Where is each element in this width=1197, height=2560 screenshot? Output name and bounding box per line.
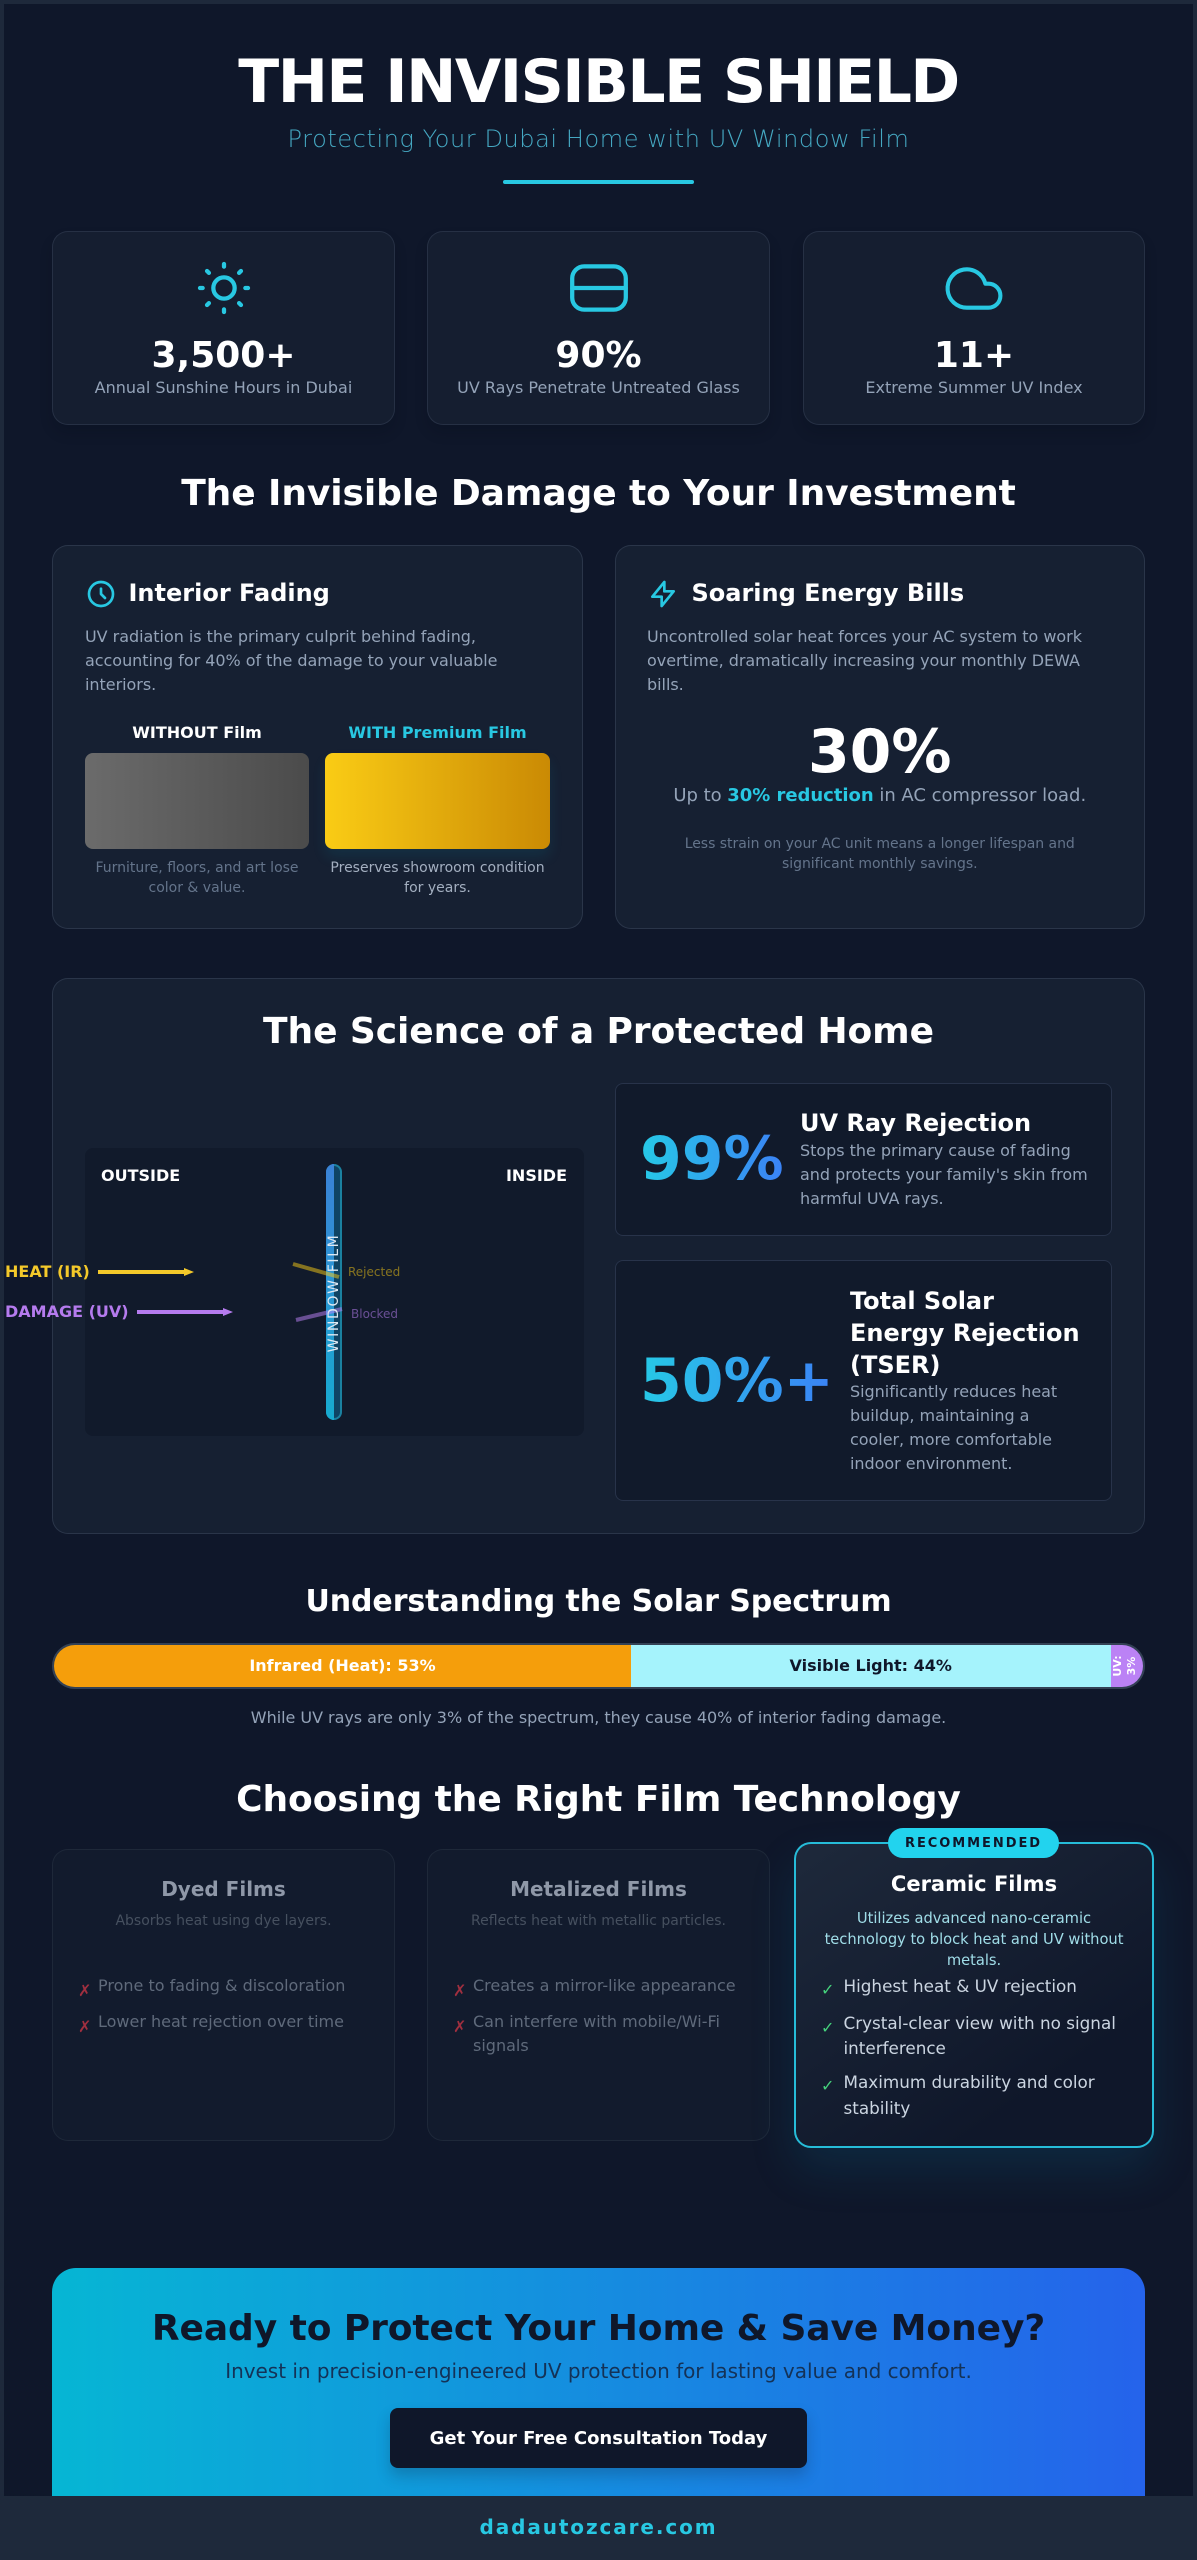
- icon: lightning bolt: [650, 580, 676, 608]
- list item: Creates a mirror-like appearance: [473, 1976, 736, 1995]
- panel: stat UV index: [803, 231, 1145, 425]
- arrow: uv: [137, 1308, 233, 1316]
- list item: ✗: [453, 2017, 466, 2036]
- metric description: [800, 1141, 1088, 1208]
- body text: [647, 627, 1082, 694]
- panel: stat sunshine hours: [52, 231, 395, 425]
- ray: uv blocked: [296, 1309, 342, 1320]
- card description: metals.: [947, 1952, 1001, 1969]
- list item: ✓: [821, 2018, 834, 2037]
- card description: [825, 1910, 1124, 1969]
- label: without film: WITHOUT Film: [132, 723, 262, 742]
- list item: Can interfere with mobile/Wi-Fi: [473, 2012, 720, 2031]
- list item: [821, 2072, 1095, 2118]
- label: heat: HEAT (IR): [5, 1262, 90, 1280]
- icon: sun: [198, 262, 250, 314]
- badge: recommended: [888, 1828, 1059, 1858]
- panel: metalized films: [427, 1849, 770, 2141]
- metric title: Total Solar: [850, 1287, 994, 1315]
- list item: Prone to fading & discoloration: [98, 1976, 345, 1995]
- card description: Absorbs heat using dye layers.: [115, 1913, 332, 1929]
- metric description: indoor environment.: [850, 1454, 1012, 1473]
- metric description: harmful UVA rays.: [800, 1189, 944, 1208]
- footnote: Less strain on your AC unit means a longer lifespan and: [685, 836, 1075, 852]
- list item: stability: [844, 2098, 910, 2118]
- panel heading: Interior Fading: [128, 579, 330, 607]
- metric title: UV Ray Rejection: [800, 1109, 1031, 1137]
- caption: preserved: [330, 860, 545, 896]
- cta button: Get Your Free Consultation Today: [430, 2428, 767, 2449]
- list item: ✓: [821, 2076, 834, 2095]
- list item: Crystal-clear view with no signal: [844, 2013, 1116, 2033]
- card title: Dyed Films: [161, 1877, 286, 1901]
- panel heading: Soaring Energy Bills: [692, 579, 964, 607]
- metric title: Energy Rejection: [850, 1319, 1080, 1347]
- panel: energy bills: [614, 545, 1145, 929]
- metric description: Significantly reduces heat: [850, 1382, 1057, 1401]
- label: rejected: Rejected: [348, 1264, 400, 1278]
- caption: faded: color & value.: [148, 880, 245, 896]
- list item: ✗: [453, 1981, 466, 2000]
- list item: [821, 2013, 1116, 2058]
- footnote: significant monthly savings.: [782, 856, 978, 872]
- body text: accounting for 40% of the damage to your valuable: [85, 651, 497, 670]
- rays: [98, 1262, 342, 1322]
- swatch: faded: [85, 753, 309, 849]
- heading: The Science of a Protected Home: [263, 1010, 934, 1052]
- title: THE INVISIBLE SHIELD: [238, 47, 959, 117]
- caption: faded: [95, 860, 299, 896]
- body text: interiors.: [85, 675, 156, 694]
- segment: infrared: Infrared (Heat): 53%: [249, 1656, 436, 1675]
- list item: ✗: [78, 1981, 91, 2000]
- list item: ✗: [78, 2017, 91, 2036]
- title underline: [503, 180, 694, 184]
- card description: technology to block heat and UV without: [825, 1931, 1123, 1948]
- ray: heat rejected: [293, 1264, 339, 1277]
- metric value: 99%: [640, 1124, 784, 1194]
- metric description: buildup, maintaining a: [850, 1406, 1029, 1425]
- heading: invisible damage: The Invisible Damage to Your Investment: [181, 472, 1016, 514]
- metric description: cooler, more comfortable: [850, 1430, 1052, 1449]
- metric description: [850, 1382, 1057, 1473]
- caption: preserved: for years.: [404, 880, 471, 896]
- swatch: preserved: [325, 753, 550, 849]
- caption: faded: Furniture, floors, and art lose: [95, 860, 299, 876]
- metric title: (TSER): [850, 1351, 940, 1379]
- big stat: 30%: [808, 716, 952, 786]
- metric card: TSER: [615, 1260, 1112, 1501]
- metric value: 50%+: [640, 1346, 834, 1416]
- uv label: UV:: [1110, 1655, 1124, 1677]
- spectrum caption: While UV rays are only 3% of the spectrum, they cause 40% of interior fading damage.: [251, 1708, 946, 1727]
- card title: Metalized Films: [510, 1877, 687, 1901]
- stat description: Up to 30% reduction in AC compressor load.: [673, 785, 1086, 806]
- label: outside: OUTSIDE: [101, 1166, 180, 1185]
- cta heading: Ready to Protect Your Home & Save Money?: [152, 2308, 1045, 2348]
- cta button: [390, 2408, 807, 2468]
- metric description: and protects your family's skin from: [800, 1165, 1088, 1184]
- segment: infrared: [54, 1645, 631, 1687]
- metric card: UV rejection: [615, 1083, 1112, 1236]
- footer website: dadautozcare.com: [479, 2514, 718, 2538]
- body text: UV radiation is the primary culprit behind fading,: [85, 627, 476, 646]
- stat number: 3,500+: [151, 335, 296, 376]
- segment: visible: Visible Light: 44%: [790, 1656, 952, 1675]
- body text: Uncontrolled solar heat forces your AC system to work: [647, 627, 1082, 646]
- list item: ✓: [821, 1980, 834, 1999]
- stat number: 11+: [934, 335, 1014, 376]
- card title: Ceramic Films: [891, 1872, 1057, 1896]
- icon: window glass: [570, 264, 628, 312]
- uv label: 3%: [1124, 1657, 1138, 1675]
- film gradient: [326, 1164, 334, 1420]
- segment: visible: [631, 1645, 1110, 1687]
- film layer: [326, 1164, 342, 1420]
- icon: clock: [88, 580, 114, 608]
- panel: interior fading: [52, 545, 582, 929]
- list item: Highest heat & UV rejection: [844, 1976, 1077, 1996]
- body text: overtime, dramatically increasing your monthly DEWA: [647, 651, 1080, 670]
- list item: [453, 2012, 720, 2055]
- heading: solar spectrum: Understanding the Solar Spectrum: [305, 1584, 892, 1618]
- metric description: Stops the primary cause of fading: [800, 1141, 1071, 1160]
- body text: bills.: [647, 675, 684, 694]
- label: with film: WITH Premium Film: [348, 723, 527, 742]
- stat number: 90%: [555, 335, 642, 376]
- film label: WINDOW FILM: [326, 1233, 342, 1352]
- footnote: [685, 836, 1075, 872]
- badge: recommended: RECOMMENDED: [905, 1836, 1042, 1850]
- list item: interference: [844, 2038, 946, 2058]
- panel: call to action: [52, 2268, 1145, 2508]
- cta subtext: Invest in precision-engineered UV protection for lasting value and comfort.: [225, 2359, 972, 2383]
- panel: stat UV penetration: [427, 231, 770, 425]
- list item: signals: [473, 2036, 529, 2055]
- metric title: [850, 1287, 1080, 1379]
- stat label: Annual Sunshine Hours in Dubai: [95, 378, 352, 397]
- panel: dyed films: [52, 1849, 395, 2141]
- subtitle: Protecting Your Dubai Home with UV Window Film: [288, 125, 909, 153]
- arrow: heat: [98, 1268, 194, 1276]
- window film diagram: [85, 1148, 584, 1436]
- label: blocked: Blocked: [351, 1307, 398, 1321]
- footer: [0, 2496, 1197, 2560]
- label: damage: DAMAGE (UV): [5, 1302, 129, 1320]
- panel: ceramic films: [794, 1842, 1154, 2148]
- stat label: Extreme Summer UV Index: [865, 378, 1083, 397]
- caption: preserved: Preserves showroom condition: [330, 860, 545, 876]
- card description: Utilizes advanced nano-ceramic: [857, 1910, 1091, 1927]
- stat label: UV Rays Penetrate Untreated Glass: [457, 378, 740, 397]
- segment: uv: [1110, 1645, 1144, 1687]
- spectrum bar: [52, 1643, 1145, 1689]
- uv label: [1110, 1655, 1138, 1677]
- label: inside: INSIDE: [506, 1166, 567, 1185]
- heading: film technology: Choosing the Right Film Technology: [236, 1778, 961, 1820]
- list item: Lower heat rejection over time: [98, 2012, 344, 2031]
- list item: Maximum durability and color: [844, 2072, 1095, 2092]
- body text: [85, 627, 497, 694]
- card description: Reflects heat with metallic particles.: [471, 1913, 726, 1929]
- panel: science: [52, 978, 1145, 1534]
- icon: cloud: [946, 267, 1002, 310]
